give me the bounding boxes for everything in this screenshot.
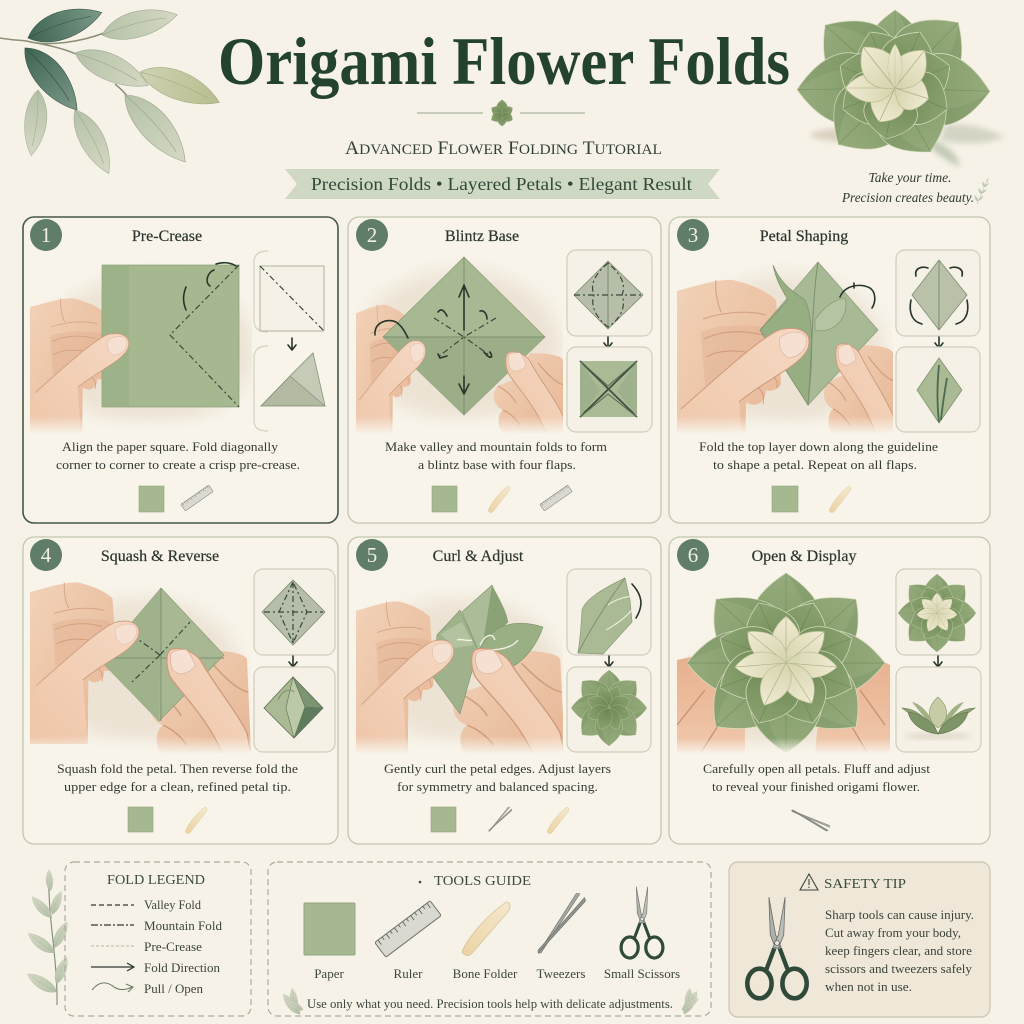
caption: Gently curl the petal edges. Adjust layers — [384, 761, 611, 776]
tools used — [791, 806, 831, 832]
tool: ruler — [375, 901, 441, 981]
caption: Squash fold the petal. Then reverse fold the — [57, 761, 298, 776]
step number 3: 3 — [688, 223, 698, 247]
caption — [385, 439, 607, 472]
step title: Squash & Reverse — [101, 548, 219, 565]
diagram: fold square to triangle — [254, 251, 325, 431]
step title: Curl & Adjust — [433, 548, 524, 565]
banner ribbon: Precision Folds • Layered Petals • Elegant Result — [311, 174, 692, 194]
illustration: hands holding finished flower — [677, 573, 893, 754]
illustration: hands shaping a petal — [677, 262, 893, 432]
icon: header origami flower — [796, 0, 1005, 170]
caption: to shape a petal. Repeat on all flaps. — [713, 457, 917, 472]
diagram: petal shaping — [896, 250, 980, 432]
panel: step 6 — [669, 537, 990, 844]
caption — [56, 439, 300, 472]
step number 6 — [677, 539, 709, 571]
caption — [699, 439, 938, 472]
step number 3 — [677, 219, 709, 251]
safety text: scissors and tweezers safely — [825, 961, 972, 976]
step number 6: 6 — [688, 543, 698, 567]
caption: for symmetry and balanced spacing. — [397, 779, 598, 794]
caption: Carefully open all petals. Fluff and adjust — [703, 761, 930, 776]
tool: tweezers: Tweezers — [537, 966, 585, 981]
icon: warning triangle — [800, 874, 818, 890]
tool: small scissors — [604, 887, 680, 981]
step title: Blintz Base — [445, 228, 519, 245]
tool: bone folder — [453, 899, 518, 981]
caption: to reveal your finished origami flower. — [712, 779, 920, 794]
tool: small scissors: Small Scissors — [604, 966, 680, 981]
tool: tweezers — [532, 892, 587, 981]
legend: mountain fold — [91, 918, 222, 933]
tools used — [772, 485, 853, 514]
step number 4: 4 — [41, 543, 52, 567]
step number 5: 5 — [367, 543, 377, 567]
caption: a blintz base with four flaps. — [418, 457, 576, 472]
legend: valley fold — [91, 897, 201, 912]
tools used — [128, 806, 209, 835]
caption: corner to corner to create a crisp pre-crease. — [56, 457, 300, 472]
safety text: Sharp tools can cause injury. — [825, 907, 974, 922]
step title: Open & Display — [752, 548, 856, 565]
safety text: when not in use. — [825, 979, 912, 994]
tool: bone folder: Bone Folder — [453, 966, 518, 981]
tool: paper: Paper — [314, 966, 344, 981]
tool: ruler: Ruler — [394, 966, 423, 981]
caption: Align the paper square. Fold diagonally — [62, 439, 279, 454]
title ornament — [417, 100, 585, 126]
legend: pre-crease: Pre-Crease — [144, 939, 202, 954]
safety text: Cut away from your body, — [825, 925, 961, 940]
tools heading: TOOLS GUIDE — [434, 874, 531, 889]
tools note: Use only what you need. Precision tools help with delicate adjustments. — [307, 996, 673, 1011]
step number 5 — [356, 539, 388, 571]
step number 2 — [356, 219, 388, 251]
quote note: Precision creates beauty. — [841, 190, 974, 205]
illustration: hand holding square paper — [29, 263, 255, 446]
tools used — [431, 806, 571, 835]
diagram: flower and lotus view — [896, 569, 981, 752]
tools used — [139, 485, 213, 512]
diagram: blintz base — [567, 250, 652, 432]
panel: fold legend — [65, 862, 251, 1016]
decoration: corner sprigs — [280, 988, 700, 1017]
tools used — [432, 485, 572, 514]
legend: fold direction: Fold Direction — [144, 960, 220, 975]
panel: step 1 — [23, 217, 338, 523]
step number 1: 1 — [41, 223, 51, 247]
safety text: keep fingers clear, and store — [825, 943, 972, 958]
banner ribbon — [285, 169, 720, 199]
panel: step 3 — [669, 217, 990, 523]
tool: paper — [304, 903, 355, 981]
step number 4 — [30, 539, 62, 571]
caption: upper edge for a clean, refined petal tip. — [64, 779, 291, 794]
decoration: top-left branch with leaves — [0, 0, 225, 179]
legend: pull / open: Pull / Open — [144, 981, 203, 996]
safety heading: SAFETY TIP — [824, 877, 906, 892]
title: Origami Flower Folds — [218, 23, 790, 99]
caption: Fold the top layer down along the guideline — [699, 439, 938, 454]
illustration: hands curling petal — [356, 585, 565, 763]
illustration: hands squash-folding — [30, 582, 252, 756]
subtitle: ADVANCED FLOWER FOLDING TUTORIAL — [345, 138, 662, 159]
caption: Make valley and mountain folds to form — [385, 439, 607, 454]
icon: legend leaf sprig — [8, 867, 83, 1009]
legend heading: FOLD LEGEND — [107, 873, 205, 888]
caption — [384, 761, 611, 794]
legend: valley fold: Valley Fold — [144, 897, 201, 912]
step title: Pre-Crease — [132, 228, 202, 245]
legend: fold direction — [91, 960, 220, 975]
legend: mountain fold: Mountain Fold — [144, 918, 222, 933]
legend: pull / open — [92, 981, 203, 996]
quote note: Take your time. — [868, 170, 952, 185]
panel: step 4 — [23, 537, 338, 844]
diagram: squash fold — [254, 569, 335, 752]
caption — [703, 761, 930, 794]
step number 1 — [30, 219, 62, 251]
illustration: hands on diamond paper — [356, 256, 563, 432]
panel: step 5 — [348, 537, 661, 844]
legend: pre-crease — [91, 939, 202, 954]
diagram: curl and flower — [567, 569, 651, 752]
step title: Petal Shaping — [760, 228, 848, 245]
icon: scissors — [747, 897, 807, 998]
quote note — [841, 170, 991, 206]
step number 2: 2 — [367, 223, 377, 247]
panel: tools guide — [268, 862, 711, 1017]
panel: safety tip — [729, 862, 990, 1017]
safety text — [825, 907, 974, 994]
caption — [57, 761, 298, 794]
panel: step 2 — [348, 217, 661, 523]
